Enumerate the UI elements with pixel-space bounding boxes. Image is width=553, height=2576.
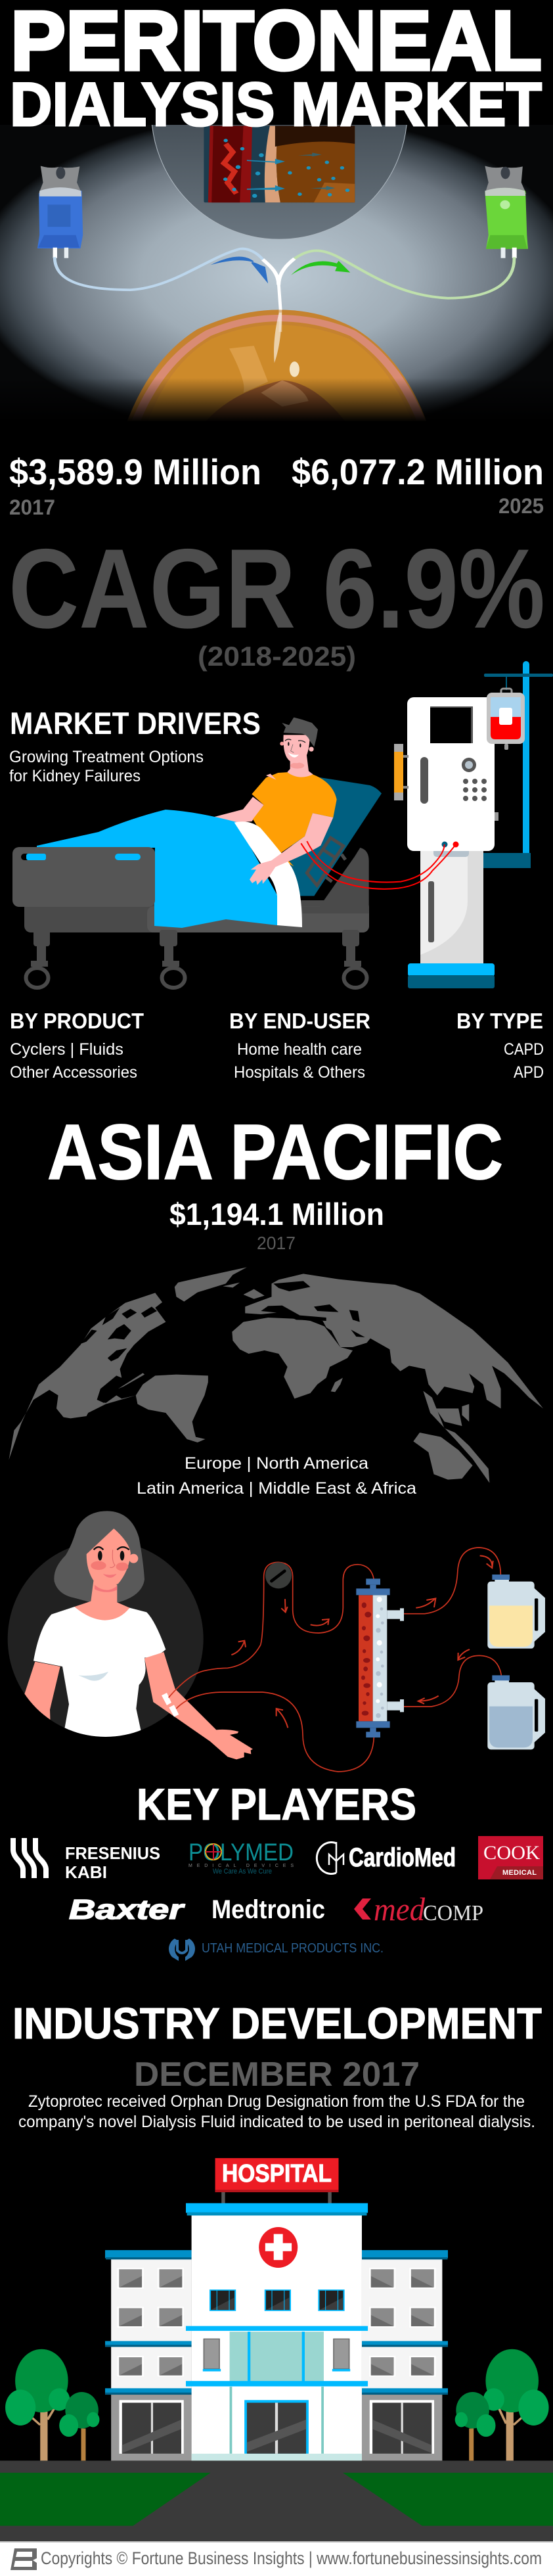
logo: Polymed: POLYMED	[188, 1839, 294, 1866]
hero illustration	[0, 125, 553, 421]
Southeast Asia	[423, 1391, 489, 1483]
dialysate bag: blue	[37, 166, 83, 258]
logo: Utah Medical: UTAH MEDICAL PRODUCTS INC.	[202, 1941, 384, 1956]
logo: Polymed	[188, 1839, 294, 1875]
industry development: Zytoprotec received Orphan Drug Designation from the U.S FDA for the	[28, 2092, 525, 2111]
head and neck	[280, 718, 318, 777]
Canadian bays and lakes	[80, 1306, 157, 1403]
market size 2017	[9, 451, 261, 519]
dialysate lines	[404, 1548, 501, 1707]
segment: by product	[10, 1009, 144, 1082]
logo: Cook Medical	[478, 1836, 543, 1879]
back rest	[286, 772, 382, 896]
market drivers	[9, 706, 261, 785]
arm and hand	[144, 1652, 253, 1759]
logo: Medcomp: med	[374, 1891, 426, 1927]
Caribbean	[118, 1373, 144, 1389]
sheet	[234, 821, 302, 927]
market size 2025	[292, 451, 544, 518]
logo: CardioMed	[317, 1842, 456, 1874]
region heading: Asia Pacific: ASIA PACIFIC	[47, 1109, 503, 1196]
segment: by end-user: Home health care	[237, 1040, 362, 1059]
title	[10, 0, 542, 139]
industry development	[12, 1999, 542, 2131]
UK	[244, 1289, 265, 1299]
dialysate arrows	[416, 1555, 493, 1704]
other regions: Europe | North America	[185, 1454, 368, 1473]
main tower	[186, 2203, 368, 2460]
inland seas	[261, 1281, 365, 1347]
arrow: green	[291, 261, 350, 275]
blood lines	[169, 1562, 374, 1772]
segment: by end-user: Hospitals & Others	[234, 1063, 365, 1082]
market size 2025: 2025	[498, 494, 544, 518]
logo: Fresenius Kabi: KABI	[65, 1862, 107, 1882]
market size 2025: $6,077.2 Million	[292, 451, 544, 492]
logo: CardioMed: CardioMed	[349, 1843, 456, 1872]
jug: used dialysate	[487, 1575, 545, 1649]
segment: by end-user	[229, 1009, 370, 1082]
region heading: Asia Pacific	[47, 1109, 503, 1253]
market size 2017: 2017	[9, 495, 55, 519]
dialysate bag: green	[485, 166, 528, 258]
region heading: Asia Pacific: $1,194.1 Million	[169, 1197, 384, 1231]
market size 2017: $3,589.9 Million	[9, 451, 261, 492]
segment: by end-user: BY END-USER	[229, 1009, 370, 1033]
logo: Polymed: We Care As We Cure	[213, 1868, 272, 1875]
arm and hand	[250, 813, 333, 885]
CAGR: (2018-2025)	[198, 641, 356, 672]
blood bag	[487, 677, 525, 750]
road and lawn	[0, 2460, 553, 2542]
logo: Polymed: MEDICAL DEVICES	[188, 1864, 294, 1868]
segment: by type: BY TYPE	[456, 1009, 543, 1033]
dialysis machine	[394, 661, 553, 988]
woman	[8, 1511, 253, 1759]
South America	[136, 1375, 208, 1442]
shirt	[252, 772, 337, 866]
region heading: Asia Pacific: 2017	[257, 1233, 296, 1253]
magnifier semicircle	[151, 125, 407, 239]
Eurasia	[245, 1274, 543, 1408]
key players heading: KEY PLAYERS	[137, 1780, 416, 1829]
foot board	[12, 847, 155, 907]
Y connector and catheter	[263, 259, 294, 313]
trees right	[455, 2349, 549, 2460]
logo: Cook Medical: COOK	[483, 1842, 540, 1864]
red tubes	[301, 841, 456, 889]
logo: Medcomp	[354, 1891, 483, 1927]
Iceland	[223, 1283, 240, 1287]
Africa	[232, 1318, 353, 1398]
hospital scene	[0, 2158, 553, 2542]
bed frame	[24, 900, 369, 988]
segment: by type	[456, 1009, 544, 1082]
Greenland	[175, 1267, 247, 1302]
industry development: company's novel Dialysis Fluid indicated to be used in peritoneal dialysis.	[18, 2113, 535, 2131]
other regions	[137, 1454, 416, 1498]
arrow: blue	[211, 257, 268, 283]
logo: Fresenius Kabi	[13, 1838, 160, 1882]
patient in bed	[12, 718, 456, 988]
market drivers: MARKET DRIVERS	[10, 706, 261, 741]
logo: Cook Medical: MEDICAL	[502, 1869, 537, 1877]
Australia	[413, 1433, 473, 1480]
trees left	[5, 2349, 99, 2460]
segment: by type: CAPD	[504, 1040, 544, 1059]
hospital sign text: HOSPITAL	[222, 2160, 332, 2188]
tube: blue inflow	[55, 249, 263, 290]
dialyzer	[356, 1578, 404, 1737]
logo: Utah Medical	[169, 1939, 384, 1961]
abdomen	[127, 310, 426, 421]
hemodialysis diagram	[8, 1511, 545, 1772]
segment: by product: Cyclers | Fluids	[10, 1040, 123, 1059]
logo: Medtronic: Medtronic	[211, 1895, 325, 1924]
left wing	[105, 2250, 192, 2460]
market drivers: for Kidney Failures	[9, 767, 141, 785]
Madagascar	[331, 1378, 343, 1392]
IV pole	[483, 661, 553, 868]
pump	[265, 1562, 292, 1588]
industry development: DECEMBER 2017	[134, 2056, 420, 2094]
logo: Fresenius Kabi: FRESENIUS	[65, 1843, 160, 1863]
blanket	[37, 810, 277, 928]
footer	[0, 2541, 553, 2576]
bed back frame	[302, 848, 369, 913]
world map	[9, 1267, 543, 1483]
jug: fresh dialysate	[487, 1675, 545, 1749]
market drivers: Growing Treatment Options	[9, 748, 204, 766]
machine base	[408, 963, 495, 988]
segment: by type: APD	[514, 1063, 544, 1082]
sign	[215, 2158, 339, 2203]
right wing	[362, 2250, 448, 2460]
tube: green outflow	[294, 250, 514, 298]
other regions: Latin America | Middle East & Africa	[137, 1479, 416, 1498]
segment: by product: BY PRODUCT	[10, 1009, 144, 1033]
logo: Medcomp: COMP	[423, 1901, 483, 1925]
flow arrows	[231, 1599, 329, 1728]
North America	[9, 1293, 166, 1460]
logo: Baxter: Baxter	[69, 1894, 186, 1925]
segment: by product: Other Accessories	[10, 1063, 137, 1082]
